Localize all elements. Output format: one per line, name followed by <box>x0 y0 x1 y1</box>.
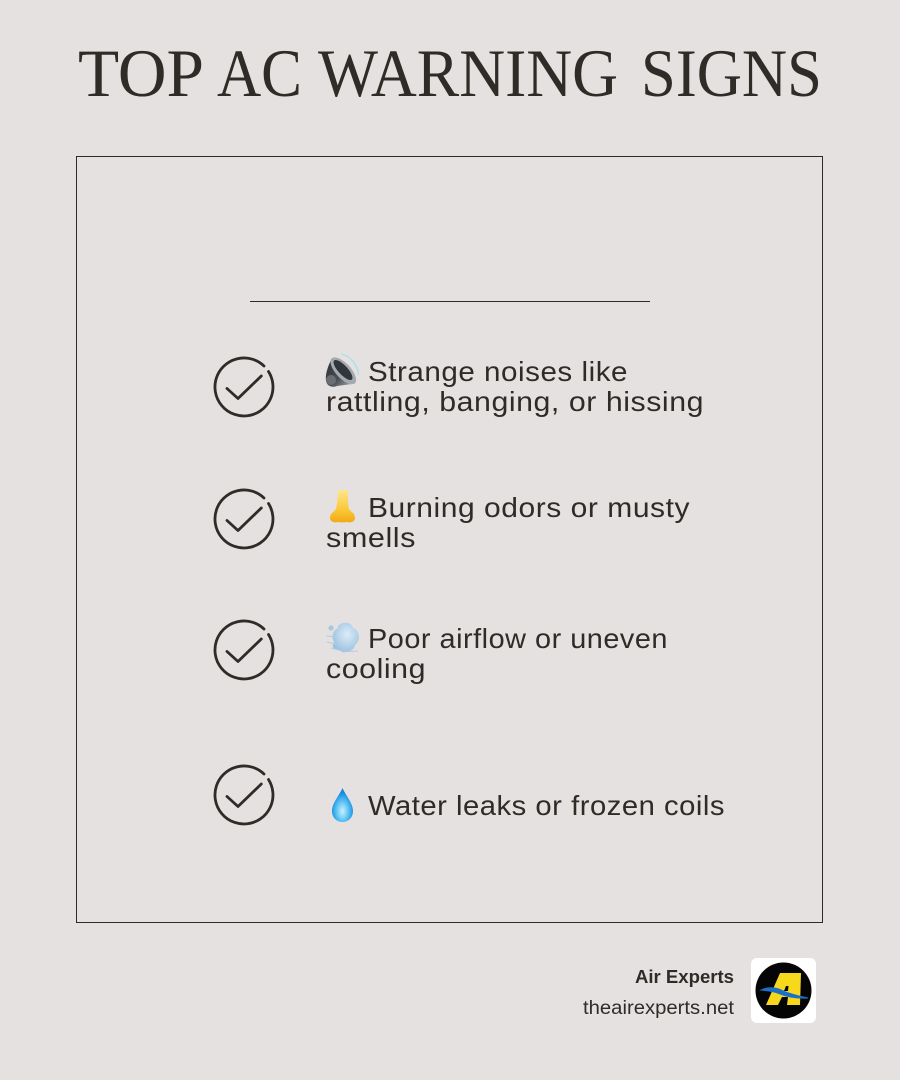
logo <box>751 958 816 1023</box>
icon: check circle 4 <box>215 766 273 824</box>
icon: check circle 2 <box>215 490 273 548</box>
item: poor airflow: cooling <box>326 653 426 684</box>
icon: dash of air <box>326 623 359 652</box>
icon: nose <box>330 490 355 522</box>
text: poor airflow: Poor airflow or uneven <box>368 623 668 654</box>
text: strange noises: Strange noises like <box>368 356 628 387</box>
title: TOP <box>78 35 204 111</box>
icon: check circle 3 <box>215 621 273 679</box>
footer: website: theairexperts.net <box>583 998 735 1019</box>
footer: brand name: Air Experts <box>635 967 734 987</box>
icon: water drop <box>332 788 353 822</box>
text: burning odors: Burning odors or musty <box>368 492 690 523</box>
title <box>78 35 822 111</box>
item: water leaks <box>215 766 725 824</box>
title: SIGNS <box>641 35 822 111</box>
item: strange noises: rattling, banging, or hissing <box>326 386 704 417</box>
item: strange noises <box>215 353 704 417</box>
text: water leaks: Water leaks or frozen coils <box>368 790 725 821</box>
item: burning odors <box>215 490 690 553</box>
panel: warning signs frame <box>76 156 822 922</box>
item: poor airflow <box>215 621 668 684</box>
icon: check circle 1 <box>215 358 273 416</box>
title: WARNING <box>318 35 618 111</box>
icon: speaker <box>326 353 360 388</box>
item: burning odors: smells <box>326 522 416 553</box>
title: AC <box>217 35 302 111</box>
